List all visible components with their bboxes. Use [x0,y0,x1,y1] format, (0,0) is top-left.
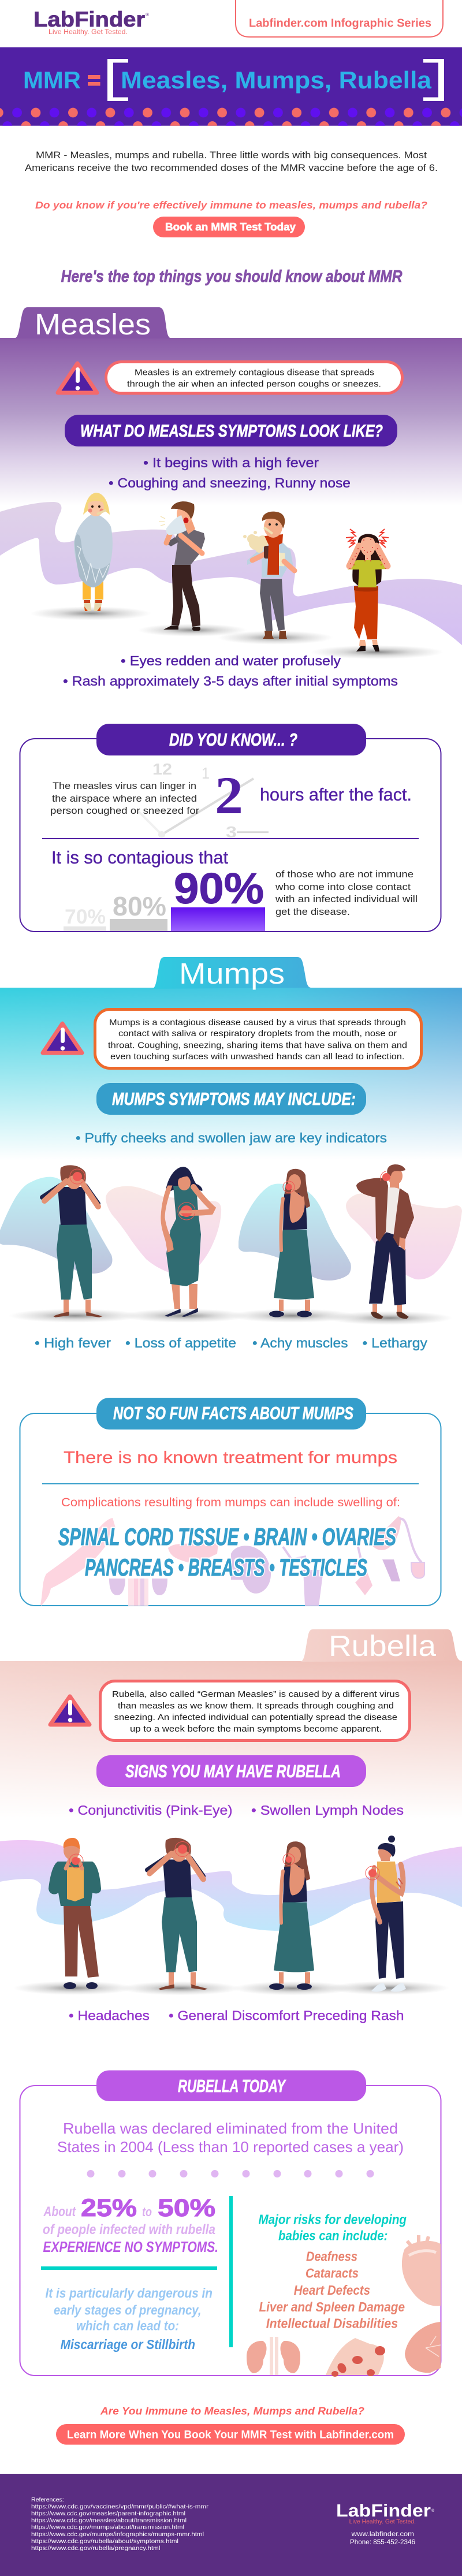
heading: rubella signs [96,1755,366,1787]
measles callout: through the air when an infected person coughs or sneezes. [127,379,381,389]
references: https://www.cdc.gov/measles/parent-infographic.html [31,2510,185,2517]
rubella tab: Rubella [329,1629,437,1662]
footer [0,2474,462,2576]
stat: ninety percent chart: 70% [65,906,106,928]
pregnancy risk: which can lead to: [76,2318,179,2333]
figure: man with scarf and mug [218,512,333,645]
signs list top: • Conjunctivitis (Pink-Eye) [69,1803,232,1818]
risks for babies: Liver and Spleen Damage [259,2299,405,2314]
organ illustrations [40,1516,424,1606]
references: https://www.cdc.gov/measles/about/transmission.html [31,2517,187,2524]
footer logo and contact [336,2500,435,2546]
stat: 25 to 50 percent: 25% [81,2194,137,2222]
closing question: Are You Immune to Measles, Mumps and Rubella? [100,2405,364,2417]
mumps callout: Mumps is a contagious disease caused by a virus that spreads through [109,1018,406,1028]
stat: two hours [50,766,412,825]
references: https://www.cdc.gov/vaccines/vpd/mmr/public/#what-is-mmr [31,2503,209,2510]
risks for babies: Intellectual Disabilities [266,2316,398,2331]
panel: mumps [0,957,462,1350]
no treatment statement: There is no known treatment for mumps [64,1449,397,1467]
heading: mumps symptoms: MUMPS SYMPTOMS MAY INCLUDE: [112,1089,356,1109]
symptom list top: • It begins with a high fever [143,455,319,470]
risks for babies: Major risks for developing [259,2212,407,2227]
stat: two hours: 2 [215,766,243,825]
rubella callout: than measles as we know them. It spreads through coughing and [118,1701,394,1711]
stat: ninety percent chart: 90% [174,864,264,913]
intro text: MMR - Measles, mumps and rubella. Three little words with big consequences. Most [36,150,427,161]
heading: mumps facts: NOT SO FUN FACTS ABOUT MUMPS [113,1403,353,1423]
footer logo and contact: www.labfinder.com [351,2530,414,2538]
panel: rubella [0,1629,462,2023]
references: https://www.cdc.gov/mumps/about/transmission.html [31,2524,184,2531]
references: References: [31,2496,64,2503]
logo: LabFinder: ® [146,12,149,17]
figure: man with sore neck (lethargy) [326,1164,453,1325]
title banner [0,47,462,126]
stat: 25 to 50 percent: About [43,2204,76,2220]
background blobs [0,1177,462,1280]
symptom labels [35,1335,428,1350]
mumps tab [152,957,311,990]
organ illustrations [247,2235,441,2377]
pregnancy risk [45,2285,213,2352]
figure: woman with rash [311,529,444,659]
symptom list top: • Coughing and sneezing, Runny nose [109,475,351,490]
mumps tab: Mumps [179,957,285,990]
symptom labels: • Loss of appetite [125,1335,236,1350]
title banner: MMR [23,66,81,94]
stat: two hours: hours after the fact. [260,784,412,805]
figure: man sneezing [137,501,247,636]
heading: did you know: DID YOU KNOW... ? [169,729,297,750]
complications list [58,1523,396,1581]
icon: warning triangle [50,1696,90,1725]
stat: ninety percent chart [51,847,418,931]
risks for babies: Deafness [306,2249,357,2264]
figure: woman with sore arm [328,1836,449,1995]
rubella callout [100,1681,410,1741]
clock illustration: 12 [152,760,172,778]
clock illustration [139,760,269,841]
mumps callout: contact with saliva or respiratory droplets from the mouth, nose or [118,1029,397,1038]
figure: child in blanket [30,493,151,620]
immunity question: Do you know if you're effectively immune to measles, mumps and rubella? [35,199,427,211]
measles callout: Measles is an extremely contagious disease that spreads [135,367,374,378]
title banner: Measles, Mumps, Rubella [121,66,432,94]
mumps callout [95,1010,422,1069]
series tab: Labfinder.com Infographic Series [249,17,431,30]
stat: two hours: the airspace where an infected [52,793,197,804]
stat: 25 to 50 percent: of people infected with rubella [43,2222,215,2238]
stat: ninety percent chart: get the disease. [275,906,350,917]
stat: ninety percent chart: of those who are not immune [275,869,413,880]
subheading: Here's the top things you should know about MMR [61,267,403,286]
signs list top: • Swollen Lymph Nodes [251,1803,404,1818]
heading: mumps symptoms [96,1083,366,1115]
figure: woman holding jaw [232,1841,353,1995]
footer logo and contact: ® [431,2508,435,2513]
stat: ninety percent chart: with an infected individual will [275,894,418,904]
elimination statement: States in 2004 (Less than 10 reported cases a year) [57,2138,404,2156]
pregnancy risk: Miscarriage or Stillbirth [61,2337,195,2352]
heading: rubella today: RUBELLA TODAY [178,2076,286,2096]
clock illustration: 3 [226,823,237,841]
pregnancy risk: early stages of pregnancy, [54,2303,201,2318]
symptom labels: • Achy muscles [252,1335,348,1350]
intro text [25,150,438,173]
mumps callout: throat. Coughing, sneezing, sharing items that have saliva on them and [108,1041,407,1050]
button: learn more [56,2424,405,2445]
symptom list top [109,455,351,490]
heading: rubella today [96,2070,366,2101]
signs list top [69,1803,404,1818]
figure: woman with headache (high fever) [9,1165,141,1323]
mumps callout: even touching surfaces with unwashed hands can all lead to infection. [110,1052,404,1062]
references [31,2496,209,2552]
icon: warning triangle [43,1023,82,1053]
references: https://www.cdc.gov/rubella/about/symptoms.html [31,2538,178,2545]
elimination statement: Rubella was declared eliminated from the United [63,2120,398,2137]
rubella callout: Rubella, also called “German Measles” is caused by a different virus [112,1689,400,1699]
clock illustration: 1 [202,764,210,782]
symptom list bottom: • Rash approximately 3-5 days after initial symptoms [63,673,398,688]
stat: two hours: person coughed or sneezed for [50,805,199,816]
footer logo and contact: LabFinder [336,2500,431,2521]
rubella callout: up to a week before the main symptoms become apparent. [130,1724,382,1734]
heading: did you know [96,724,366,755]
references: https://www.cdc.gov/mumps/infographics/mumps-mmr.html [31,2531,204,2538]
footer logo and contact: Phone: 855-452-2346 [350,2538,415,2546]
symptom labels: • Lethargy [363,1335,428,1350]
stat: ninety percent chart: It is so contagious that [51,847,228,868]
risks for babies [259,2212,407,2331]
figure: woman holding jaw (achy muscles) [229,1169,356,1323]
risks for babies: Heart Defects [294,2283,370,2298]
measles callout [106,362,402,393]
heading: symptoms: WHAT DO MEASLES SYMPTOMS LOOK LIKE? [80,422,383,441]
intro text: Americans receive the two recommended doses of the MMR vaccine before the age of 6. [25,162,438,173]
series tab [236,0,443,37]
footer logo and contact: Live Healthy. Get Tested. [349,2519,416,2525]
stat: 25 to 50 percent: EXPERIENCE NO SYMPTOMS. [43,2238,218,2255]
panel: mumps facts [20,1398,441,1606]
stat: 25 to 50 percent: to [142,2205,152,2219]
signs list bottom [69,2008,404,2023]
signs list bottom: • Headaches [69,2008,150,2023]
measles tab [14,307,172,341]
lavender wave [0,502,462,645]
symptom list bottom [63,653,398,688]
icon: warning triangle [58,363,97,393]
button: book test: Book an MMR Test Today [165,221,296,233]
panel: did you know [20,724,441,932]
references: https://www.cdc.gov/rubella/pregnancy.html [31,2545,161,2552]
rubella callout: sneezing. An infected individual can potentially spread the disease [114,1713,397,1722]
button: book test [153,217,305,237]
elimination statement [57,2120,404,2156]
panel: rubella today [20,2070,441,2377]
stat: two hours: The measles virus can linger in [53,780,196,791]
heading: symptoms [65,415,397,446]
figure: woman with headache [120,1838,241,1995]
stat: 25 to 50 percent: 50% [158,2194,215,2222]
risks for babies: babies can include: [278,2228,388,2243]
pastel wave [0,1840,462,1931]
button: learn more: Learn More When You Book Your MMR Test with Labfinder.com [67,2429,394,2441]
complications intro: Complications resulting from mumps can include swelling of: [61,1496,400,1509]
dotted divider [87,2170,374,2177]
measles tab: Measles [35,308,151,341]
stat: 25 to 50 percent [43,2194,218,2255]
figure: man with scarf [13,1838,135,1995]
rubella tab [300,1629,462,1662]
panel: measles [0,307,462,688]
pregnancy risk: It is particularly dangerous in [45,2285,213,2300]
risks for babies: Cataracts [305,2266,359,2281]
stat: ninety percent chart: 80% [113,891,166,921]
heading: rubella signs: SIGNS YOU MAY HAVE RUBELLA [125,1761,341,1781]
heading: mumps facts [96,1398,366,1430]
logo: LabFinder: Live Healthy. Get Tested. [49,28,128,36]
symptom labels: • High fever [35,1335,111,1350]
key symptom: • Puffy cheeks and swollen jaw are key indicators [76,1130,387,1145]
logo: LabFinder: LabFinder [33,8,145,31]
signs list bottom: • General Discomfort Preceding Rash [169,2008,404,2023]
symptom list bottom: • Eyes redden and water profusely [121,653,341,668]
figure: woman with stomach ache (loss of appetite) [121,1167,248,1323]
stat: ninety percent chart: who come into close contact [275,881,411,892]
